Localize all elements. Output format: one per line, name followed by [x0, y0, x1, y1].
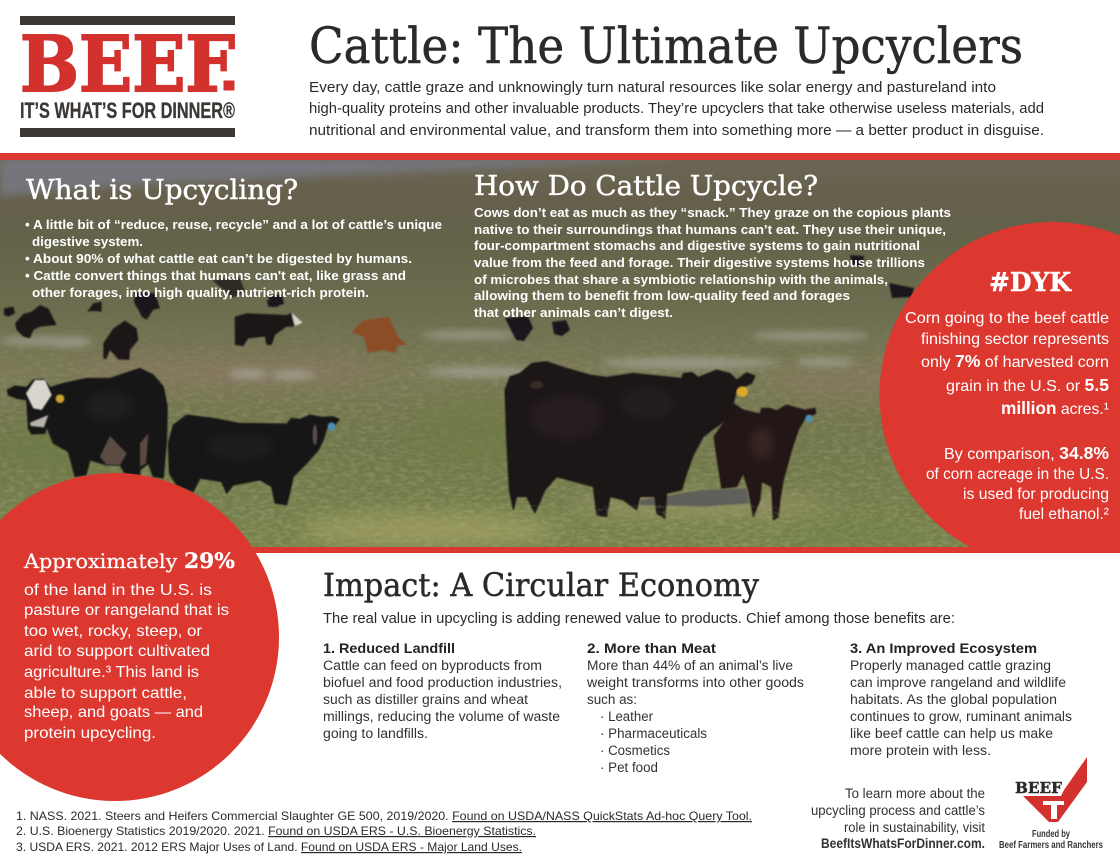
call to action: role in sustainability, visit — [844, 820, 985, 835]
DYK body text: is used for producing — [963, 486, 1109, 503]
bullet list: other forages, into high quality, nutrient-rich protein. — [32, 286, 369, 300]
column: An Improved Ecosystem — [850, 640, 1072, 758]
foreground large cow — [505, 362, 755, 518]
body text: four-compartment stomachs and digestive systems to gain nutritional — [474, 239, 920, 253]
column: An Improved Ecosystem: can improve rangeland and wildlife — [850, 675, 1066, 690]
column: Reduced Landfill: 1. Reduced Landfill — [323, 640, 455, 656]
bullet list: • Cattle convert things that humans can't eat, like grass and — [25, 269, 406, 283]
DYK body text: of corn acreage in the U.S. — [926, 466, 1109, 483]
panel: What is Upcycling — [25, 175, 442, 300]
column: Reduced Landfill: biofuel and food production industries, — [323, 675, 562, 690]
circle body text: protein upcycling. — [24, 725, 156, 742]
DYK body text: By comparison, 34.8% — [944, 443, 1109, 463]
shrubs — [0, 331, 870, 380]
column: More than Meat: such as: — [587, 692, 637, 707]
body text: of microbes that share a symbiotic relationship with the animals, — [474, 273, 888, 287]
body text — [474, 206, 951, 320]
column: More than Meat: · Cosmetics — [600, 743, 670, 758]
icon: Beef checkoff logo — [999, 757, 1103, 851]
body text: allowing them to benefit from low-quality feed and forages — [474, 289, 850, 303]
column: More than Meat — [586, 640, 804, 775]
red divider bottom — [0, 547, 1120, 553]
column: More than Meat: More than 44% of an animal’s live — [587, 658, 793, 673]
column: Reduced Landfill: millings, reducing the volume of waste — [323, 709, 560, 724]
intro paragraph: Every day, cattle graze and unknowingly turn natural resources like solar energy and pastureland into — [309, 80, 996, 96]
panel: 29% red circle — [0, 473, 279, 801]
column: More than Meat: 2. More than Meat — [587, 640, 716, 656]
feed trough — [640, 488, 749, 507]
foreground black calf — [168, 415, 339, 505]
logo: Beef It's What's For Dinner: IT’S WHAT’S FOR DINNER® — [20, 98, 235, 123]
DYK body text: only 7% of harvested corn — [921, 351, 1109, 371]
call to action: upcycling process and cattle’s — [811, 803, 985, 818]
red divider top — [0, 153, 1120, 160]
heading: How Do Cattle Upcycle? — [474, 171, 818, 202]
call to action: BeefItsWhatsForDinner.com. — [821, 836, 985, 851]
circle body text — [24, 582, 229, 742]
body text: that other animals can’t digest. — [474, 306, 673, 320]
column: Reduced Landfill: such as distiller grains and wheat — [323, 692, 528, 707]
panel: How Do Cattle Upcycle — [474, 171, 951, 320]
circle body text: able to support cattle, — [24, 685, 187, 702]
footnotes: 3. USDA ERS. 2021. 2012 ERS Major Uses of Land. Found on USDA ERS - Major Land Uses. — [16, 840, 522, 854]
DYK red circle — [879, 222, 1120, 568]
body text: Cows don’t eat as much as they “snack.” They graze on the copious plants — [474, 206, 951, 220]
column: An Improved Ecosystem: habitats. As the global population — [850, 692, 1057, 707]
grass over hooves — [496, 505, 928, 540]
DYK body text: grain in the U.S. or 5.5 — [946, 375, 1109, 395]
field colour patches — [0, 358, 950, 547]
bullet list: • A little bit of “reduce, reuse, recycle” and a lot of cattle’s unique — [25, 218, 442, 232]
body text: value from the feed and forage. Their digestive systems house trillions — [474, 256, 925, 270]
column: More than Meat: · Leather — [600, 709, 653, 724]
footnotes: 2. U.S. Bioenergy Statistics 2019/2020. 2021. Found on USDA ERS - U.S. Bioenergy Statistics. — [16, 824, 536, 838]
bullet list — [25, 218, 442, 300]
call to action — [811, 786, 985, 851]
column: An Improved Ecosystem: Properly managed cattle grazing — [850, 658, 1051, 673]
circle body text: too wet, rocky, steep, or — [24, 623, 203, 640]
column: More than Meat: · Pet food — [600, 760, 658, 775]
column: An Improved Ecosystem: continues to grow, ruminant animals — [850, 709, 1072, 724]
footnotes — [16, 809, 752, 854]
foreground cow with white face — [7, 368, 167, 478]
column: An Improved Ecosystem: 3. An Improved Ecosystem — [850, 640, 1037, 656]
footnotes: 1. NASS. 2021. Steers and Heifers Commercial Slaughter GE 500, 2019/2020. Found on USDA/NASS QuickStats Ad-hoc Query Tool. — [16, 809, 752, 823]
heading: Impact: Impact: A Circular Economy — [323, 566, 759, 604]
heading: What is Upcycling? — [26, 175, 298, 206]
column: An Improved Ecosystem: like beef cattle can help us make — [850, 726, 1053, 741]
column: Reduced Landfill — [323, 640, 562, 741]
logo: Beef It's What's For Dinner — [20, 16, 235, 137]
circle body text: pasture or rangeland that is — [24, 602, 229, 619]
DYK body text: fuel ethanol.² — [1019, 506, 1110, 523]
intro paragraph: high-quality proteins and other invaluable products. They’re upcyclers that take otherwise useless materials, add — [309, 101, 1044, 117]
photo: cattle grazing in pasture — [0, 158, 1120, 547]
logo: Beef It's What's For Dinner: BEEF — [20, 20, 235, 110]
intro paragraph: nutritional and environmental value, and transform them into something more — a better product in disguise. — [309, 123, 1044, 139]
body text: native to their surroundings that humans can’t eat. They use their unique, — [474, 223, 946, 237]
circle body text: sheep, and goats — and — [24, 704, 203, 721]
circle heading: Approximately 29% — [23, 548, 235, 573]
orange cow — [352, 317, 407, 353]
intro paragraph — [309, 80, 1044, 139]
column: Reduced Landfill: going to landfills. — [323, 726, 428, 741]
icon: Beef checkoff logo: Funded by — [1032, 829, 1070, 840]
calf beside cow — [714, 403, 816, 520]
icon: Beef checkoff logo: BEEF — [1015, 779, 1062, 797]
circle body text: arid to support cultivated — [24, 643, 210, 660]
DYK body text: Corn going to the beef cattle — [905, 310, 1109, 327]
bullet list: • About 90% of what cattle eat can’t be digested by humans. — [25, 252, 412, 266]
column: More than Meat: · Pharmaceuticals — [600, 726, 707, 741]
DYK body text: finishing sector represents — [921, 331, 1109, 348]
impact subtitle: The real value in upcycling is adding renewed value to products. Chief among those benefits are: — [323, 611, 955, 627]
column: Reduced Landfill: Cattle can feed on byproducts from — [323, 658, 542, 673]
title: Cattle: The Ultimate Upcyclers — [309, 17, 1023, 75]
bullet list: digestive system. — [32, 235, 143, 249]
circle body text: agriculture.³ This land is — [24, 664, 199, 681]
DYK body text: million acres.¹ — [1001, 398, 1109, 418]
DYK heading: #DYK — [989, 268, 1072, 298]
column: An Improved Ecosystem: more protein with less. — [850, 743, 991, 758]
call to action: To learn more about the — [845, 786, 985, 801]
DYK body text — [905, 310, 1110, 523]
distant cows — [4, 300, 303, 360]
circle body text: of the land in the U.S. is — [24, 582, 212, 599]
column: More than Meat: weight transforms into other goods — [586, 675, 804, 690]
